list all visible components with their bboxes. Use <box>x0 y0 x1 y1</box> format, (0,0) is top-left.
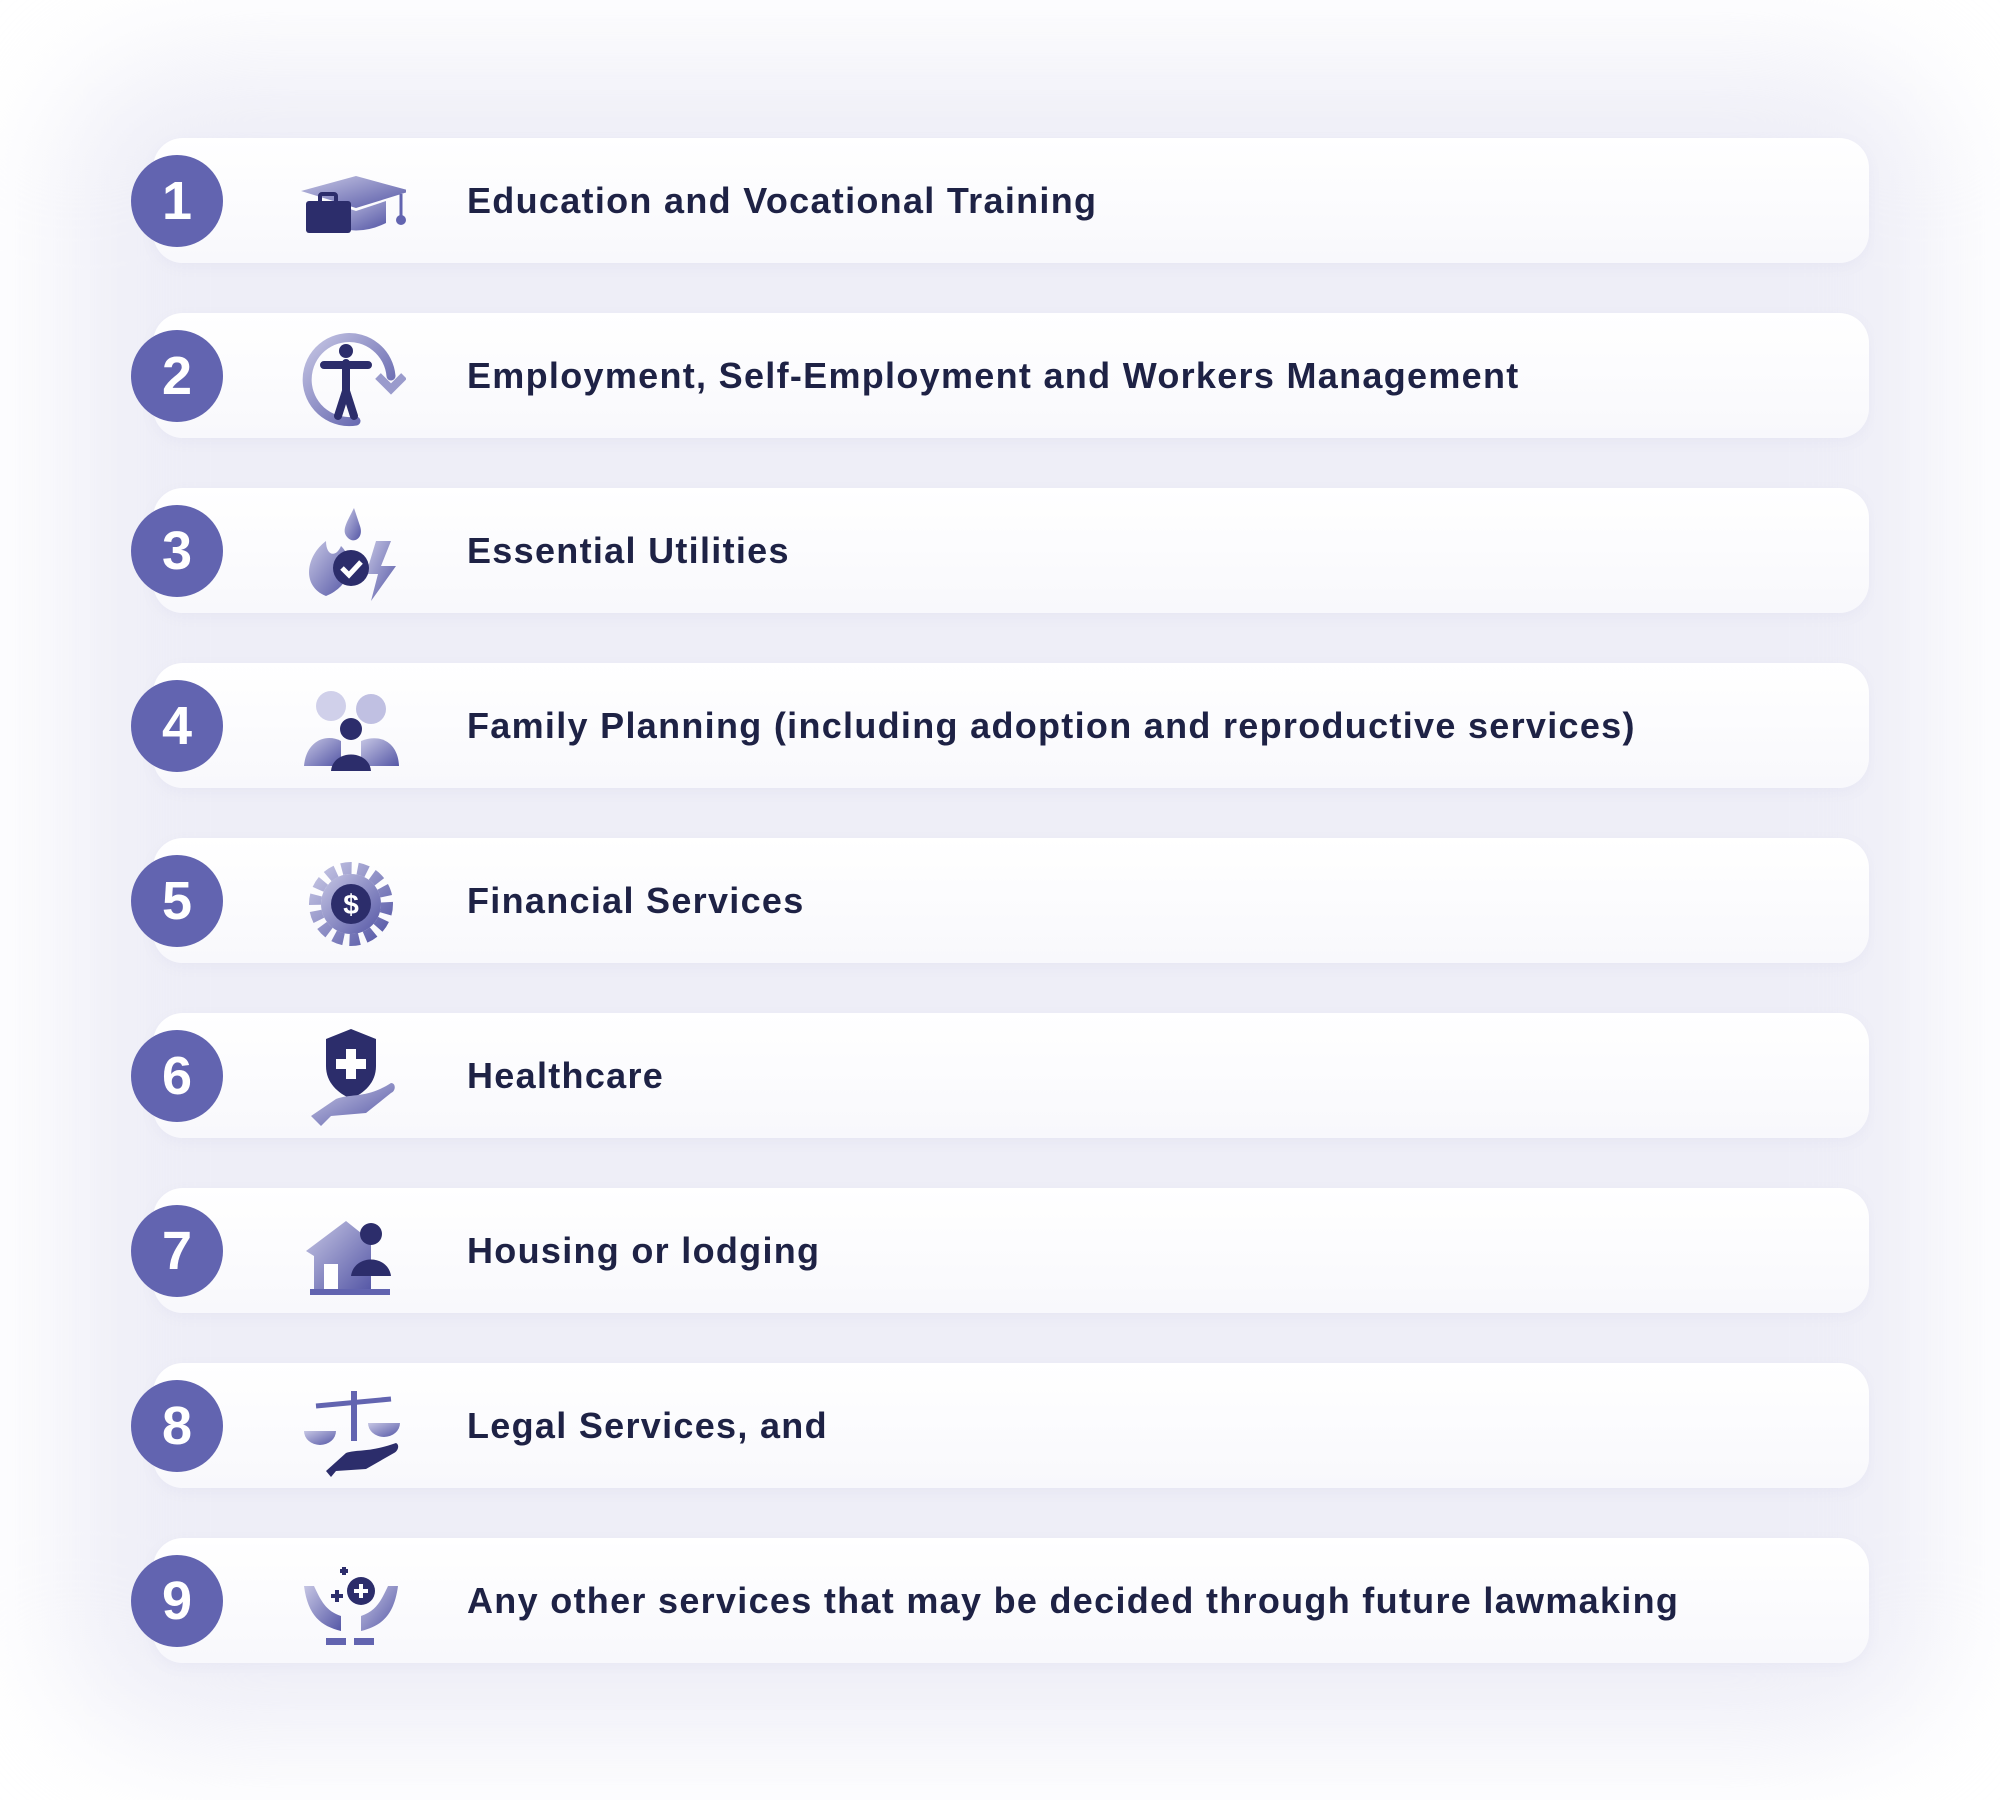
text 7: Housing or lodging <box>467 1230 820 1271</box>
row 3 <box>131 488 1869 613</box>
card 9 <box>153 1538 1869 1663</box>
number 9: 9 <box>162 1571 192 1631</box>
number 5 <box>131 855 223 947</box>
number 3 <box>131 505 223 597</box>
number 3: 3 <box>162 521 192 581</box>
row 1 <box>131 138 1869 263</box>
row 5 <box>131 838 1869 963</box>
number 8 <box>131 1380 223 1472</box>
number 7 <box>131 1205 223 1297</box>
row 8 <box>131 1363 1869 1488</box>
icon: family <box>304 691 399 771</box>
row 6 <box>131 1013 1869 1138</box>
number 2 <box>131 330 223 422</box>
text 5: Financial Services <box>467 880 805 921</box>
number 1: 1 <box>162 171 192 231</box>
icon: healthcare <box>311 1029 395 1126</box>
number 9 <box>131 1555 223 1647</box>
icon: graduation cap <box>301 176 406 233</box>
number 1 <box>131 155 223 247</box>
number 6 <box>131 1030 223 1122</box>
number 7: 7 <box>162 1221 192 1281</box>
card 3 <box>153 488 1869 613</box>
text 8: Legal Services, and <box>467 1405 828 1446</box>
text 4: Family Planning (including adoption and reproductive services) <box>467 705 1636 746</box>
row 7 <box>131 1188 1869 1313</box>
number 4: 4 <box>162 696 192 756</box>
text 6: Healthcare <box>467 1055 664 1096</box>
card 5 <box>153 838 1869 963</box>
text 3: Essential Utilities <box>467 530 790 571</box>
number 8: 8 <box>162 1396 192 1456</box>
icon: person cycle <box>302 333 406 426</box>
icon: housing <box>306 1221 391 1295</box>
card 2 <box>153 313 1869 438</box>
card 4 <box>153 663 1869 788</box>
card 8 <box>153 1363 1869 1488</box>
text 9: Any other services that may be decided through future lawmaking <box>467 1580 1679 1621</box>
number 6: 6 <box>162 1046 192 1106</box>
text 2: Employment, Self-Employment and Workers Management <box>467 355 1520 396</box>
icon: other services hands <box>304 1567 398 1645</box>
icon: utilities <box>309 508 396 601</box>
row 9 <box>131 1538 1869 1663</box>
number 2: 2 <box>162 346 192 406</box>
row 2 <box>131 313 1869 438</box>
icon: dollar gear: $ <box>343 889 359 920</box>
row 4 <box>131 663 1869 788</box>
text 1: Education and Vocational Training <box>467 180 1097 221</box>
card 6 <box>153 1013 1869 1138</box>
card 7 <box>153 1188 1869 1313</box>
icon: dollar gear <box>309 862 393 946</box>
icon: legal scale <box>304 1391 400 1477</box>
number 4 <box>131 680 223 772</box>
number 5: 5 <box>162 871 192 931</box>
card 1 <box>153 138 1869 263</box>
